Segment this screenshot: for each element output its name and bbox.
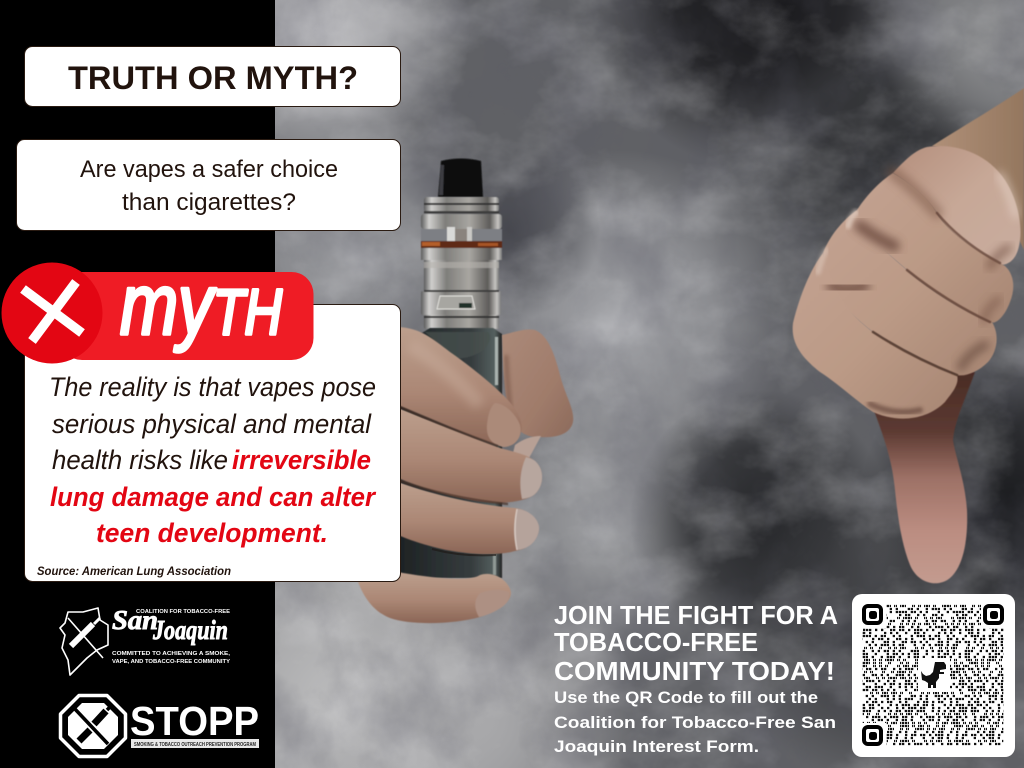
vape tank	[421, 197, 502, 329]
ring finger	[398, 482, 539, 554]
San Joaquin script name: Joaquin	[152, 615, 228, 645]
myth explanation panel	[24, 304, 400, 582]
coalition tagline: COMMITTED TO ACHIEVING A SMOKE,	[112, 651, 231, 657]
explanation text: teen development.	[96, 518, 328, 548]
QR code card	[852, 594, 1015, 757]
call to action text	[554, 600, 838, 756]
explanation text: lung damage and can alter	[50, 482, 376, 512]
photo: thumbs-down fist	[793, 88, 1024, 583]
coalition logo	[60, 605, 231, 675]
call to action body: Use the QR Code to fill out the	[554, 688, 818, 707]
knuckle and crease shadows	[818, 173, 1016, 412]
middle finger	[398, 408, 542, 504]
myth word: myTH	[120, 257, 283, 353]
call to action body: Coalition for Tobacco-Free San	[554, 713, 836, 732]
source: Source: American Lung Association	[37, 566, 231, 578]
STOPP banner	[131, 739, 259, 748]
forearm	[932, 88, 1024, 250]
call to action body	[554, 688, 836, 756]
call to action heading: TOBACCO-FREE	[554, 627, 758, 657]
x circle icon	[2, 262, 102, 364]
QR dinosaur icon	[918, 658, 950, 692]
call to action heading: COMMUNITY TODAY!	[554, 656, 835, 686]
fourth finger of fist	[793, 253, 958, 419]
vape mouthpiece	[438, 158, 483, 197]
octagon no-vape icon	[60, 696, 126, 756]
question text: than cigarettes?	[122, 189, 296, 216]
question box	[16, 140, 400, 230]
vape battery body	[400, 328, 502, 578]
thumb	[502, 329, 573, 460]
question text	[80, 156, 338, 216]
question text: Are vapes a safer choice	[80, 156, 338, 183]
third finger of fist	[823, 210, 997, 375]
QR finder patterns	[860, 602, 1007, 749]
second finger of fist	[857, 173, 1013, 323]
explanation text	[49, 372, 376, 548]
San Joaquin script name	[112, 605, 228, 645]
STOPP logo	[60, 696, 259, 756]
explanation text: The reality is that vapes pose	[49, 372, 376, 402]
explanation text: health risks like	[52, 445, 228, 475]
call to action heading: JOIN THE FIGHT FOR A	[554, 600, 838, 630]
coalition small title: COALITION FOR TOBACCO-FREE	[136, 609, 230, 615]
call to action heading	[554, 600, 838, 686]
background photo: smoke and dark shirt	[275, 0, 1024, 768]
STOPP banner: SMOKING & TOBACCO OUTREACH PREVENTION PROGRAM	[134, 742, 256, 748]
coalition tagline	[112, 651, 231, 665]
coalition tagline: VAPE, AND TOBACCO-FREE COMMUNITY	[112, 659, 230, 665]
explanation text: serious physical and mental	[52, 409, 372, 439]
explanation text: irreversible	[232, 445, 371, 475]
county outline icon	[60, 608, 108, 675]
title box	[24, 46, 400, 106]
QR modules	[862, 606, 1004, 744]
San Joaquin script name: San	[112, 605, 158, 635]
index finger	[398, 327, 522, 447]
thumb	[873, 372, 975, 583]
index finger of fist	[893, 146, 1020, 265]
title text: TRUTH OR MYTH?	[68, 60, 358, 96]
ring finger shadow on body	[432, 549, 496, 555]
lower palm and little finger	[358, 572, 511, 623]
photo: hand holding vape	[358, 158, 573, 623]
STOPP word: STOPP	[130, 698, 259, 744]
myth badge	[2, 257, 314, 364]
call to action body: Joaquin Interest Form.	[554, 737, 759, 756]
